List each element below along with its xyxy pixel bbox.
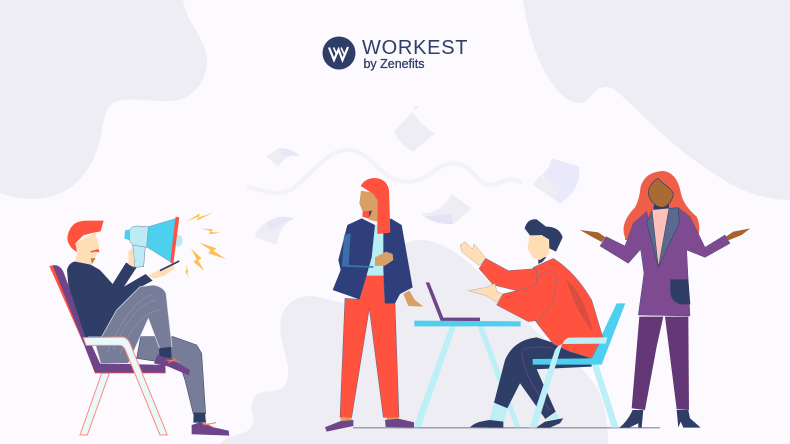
boots <box>619 410 701 428</box>
floating papers and swoosh <box>247 106 580 245</box>
shoes <box>325 417 414 432</box>
far leg <box>137 337 229 436</box>
paper: centre <box>420 194 472 224</box>
table top <box>414 321 521 326</box>
trousers <box>632 317 689 410</box>
neck and face <box>648 178 673 219</box>
chair arm <box>529 337 607 428</box>
shirt <box>367 223 383 276</box>
lapels <box>647 208 679 267</box>
laptop <box>426 282 480 321</box>
chair back and seat <box>49 265 166 373</box>
shoe <box>536 418 563 428</box>
logo <box>322 36 468 71</box>
back leg <box>80 373 109 435</box>
chair seat and back <box>533 303 625 365</box>
man with megaphone <box>49 213 229 436</box>
logo mark <box>322 36 356 70</box>
head <box>525 219 563 264</box>
face <box>359 191 377 222</box>
table and laptop <box>413 282 521 427</box>
hands <box>375 252 423 307</box>
hands and phone <box>128 248 179 279</box>
sweater shading <box>566 279 593 332</box>
torso <box>67 261 153 337</box>
trousers <box>340 275 399 417</box>
icon: sound bolts <box>185 213 226 278</box>
head and hair <box>67 221 104 265</box>
megaphone <box>124 217 183 267</box>
seated man and woman shrugging <box>460 171 750 428</box>
seated man <box>460 219 607 428</box>
chair legs <box>592 364 619 428</box>
tagline: by Zenefits <box>364 57 424 71</box>
shrugging woman <box>580 171 750 428</box>
shirt <box>652 208 669 267</box>
seated man's legs <box>470 337 592 428</box>
paper: lower left <box>255 217 295 245</box>
jacket pocket <box>670 279 690 304</box>
hair <box>623 171 699 240</box>
jacket <box>333 218 413 303</box>
jacket <box>600 208 730 316</box>
paper: top centre <box>394 106 435 152</box>
background blob: top right <box>523 0 790 200</box>
hands <box>580 228 750 242</box>
background blob: centre floor <box>220 240 608 444</box>
floor line <box>353 427 660 428</box>
paper: upper left <box>266 148 300 167</box>
near leg <box>96 285 190 375</box>
arms and hands <box>460 242 557 322</box>
hair <box>361 178 390 234</box>
chair arm and front leg <box>83 337 167 435</box>
table legs <box>413 326 520 427</box>
woman with red hair <box>325 178 423 432</box>
paper: right <box>533 158 580 203</box>
background blob: top left <box>0 0 207 199</box>
torso <box>520 258 603 358</box>
swoosh line <box>247 150 522 193</box>
wordmark: WORKEST <box>362 37 468 59</box>
sleeve pattern <box>342 233 373 268</box>
